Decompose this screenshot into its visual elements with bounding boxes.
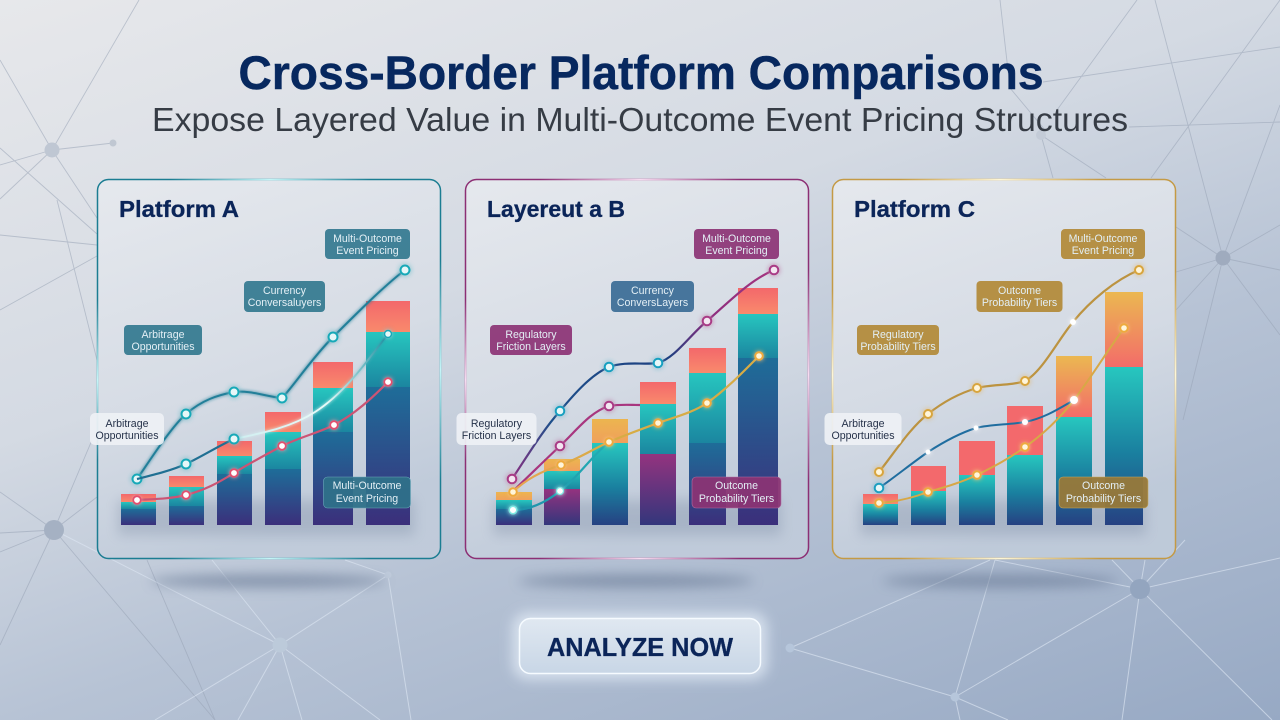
label: Regulatory Friction Layers white: Friction Layers xyxy=(462,430,531,442)
line chart: Platform C upper line xyxy=(875,266,1143,476)
label: Arbitrage Opportunities white xyxy=(824,413,902,445)
line chart: Platform B gold line xyxy=(509,352,763,496)
label: Regulatory Friction Layers: Friction Layers xyxy=(496,341,566,353)
line chart: Platform A lower line xyxy=(133,378,392,504)
label: Outcome Probability Tiers middle: Outcome xyxy=(998,285,1041,297)
label: Multi-Outcome Event Pricing top xyxy=(325,229,410,259)
label: Currency Conversaluyers xyxy=(244,281,325,312)
heading: Platform C: Platform C xyxy=(854,196,975,222)
label: Currency ConversLayers: Currency xyxy=(631,285,675,297)
line chart: Platform C blue line xyxy=(875,400,1074,492)
label: Arbitrage Opportunities: Opportunities xyxy=(131,341,195,353)
label: Arbitrage Opportunities white: Arbitrage xyxy=(842,418,885,430)
label: Arbitrage Opportunities white xyxy=(90,413,164,445)
label: Outcome Probability Tiers: Probability Tiers xyxy=(699,493,774,505)
line chart: Platform C lower line xyxy=(875,324,1128,507)
label: Multi-Outcome Event Pricing top: Event Pricing xyxy=(1072,245,1134,257)
bar chart: Platform C stacked bars xyxy=(860,292,1146,535)
label: Currency Conversaluyers: Currency xyxy=(263,285,307,297)
label: Currency ConversLayers xyxy=(611,281,694,312)
label: Currency ConversLayers: ConversLayers xyxy=(617,297,688,309)
button: ANALYZE NOW: ANALYZE NOW xyxy=(547,634,734,662)
label: Arbitrage Opportunities white: Opportunities xyxy=(831,430,895,442)
label: Regulatory Friction Layers: Regulatory xyxy=(505,329,557,341)
panel: Platform A xyxy=(90,179,441,559)
bar chart: Platform A stacked bars xyxy=(118,301,414,535)
label: Regulatory Friction Layers white: Regulatory xyxy=(471,418,523,430)
title: Cross-Border Platform Comparisons xyxy=(238,46,1044,99)
line chart: Platform B upper line xyxy=(508,266,778,483)
label: Arbitrage Opportunities white: Arbitrage xyxy=(106,418,149,430)
label: Outcome Probability Tiers middle xyxy=(976,281,1062,312)
panel ground shadows xyxy=(150,574,1118,588)
line chart: Platform A upper line xyxy=(132,266,410,484)
line chart: Platform A middle line xyxy=(137,330,392,479)
label: Multi-Outcome Event Pricing top: Event Pricing xyxy=(705,245,768,257)
label: Multi-Outcome Event Pricing top: Multi-Outcome xyxy=(333,233,402,245)
heading: Platform A: Platform A xyxy=(119,196,239,222)
subtitle: Expose Layered Value in Multi-Outcome Event Pricing Structures xyxy=(152,101,1128,138)
label: Regulatory Friction Layers xyxy=(490,325,572,355)
label: Arbitrage Opportunities: Arbitrage xyxy=(142,329,185,341)
label: Multi-Outcome Event Pricing top xyxy=(1061,229,1145,259)
label: Regulatory Friction Layers white xyxy=(456,413,536,445)
bar chart: Platform B stacked bars xyxy=(493,288,781,535)
label: Regulatory Probability Tiers xyxy=(857,325,939,355)
label: Multi-Outcome Event Pricing top: Multi-Outcome xyxy=(1069,233,1138,245)
label: Outcome Probability Tiers: Outcome xyxy=(715,480,758,492)
label: Arbitrage Opportunities xyxy=(124,325,202,355)
label: Outcome Probability Tiers bottom xyxy=(1059,477,1148,508)
label: Multi-Outcome Event Pricing bottom: Multi-Outcome xyxy=(333,480,402,492)
label: Regulatory Probability Tiers: Regulatory xyxy=(872,329,924,341)
label: Outcome Probability Tiers bottom: Probability Tiers xyxy=(1066,493,1141,505)
line chart: Platform B magenta line xyxy=(512,402,640,492)
button: ANALYZE NOW xyxy=(512,612,768,680)
label: Multi-Outcome Event Pricing top: Multi-Outcome xyxy=(702,233,771,245)
label: Currency Conversaluyers: Conversaluyers xyxy=(248,297,321,309)
label: Multi-Outcome Event Pricing bottom: Event Pricing xyxy=(336,493,398,505)
label: Multi-Outcome Event Pricing top xyxy=(694,229,779,259)
line chart: Platform B teal line xyxy=(509,442,609,514)
label: Multi-Outcome Event Pricing top: Event Pricing xyxy=(336,245,399,257)
label: Regulatory Probability Tiers: Probability Tiers xyxy=(860,341,936,353)
label: Outcome Probability Tiers middle: Probability Tiers xyxy=(982,297,1057,309)
heading: Layereut a B: Layereut a B xyxy=(487,196,625,222)
label: Arbitrage Opportunities white: Opportunities xyxy=(95,430,159,442)
panel: Platform C xyxy=(824,179,1176,559)
label: Multi-Outcome Event Pricing bottom xyxy=(324,477,410,508)
label: Outcome Probability Tiers bottom: Outcome xyxy=(1082,480,1125,492)
label: Outcome Probability Tiers xyxy=(692,477,781,508)
panel: Layereut a B xyxy=(456,179,809,559)
